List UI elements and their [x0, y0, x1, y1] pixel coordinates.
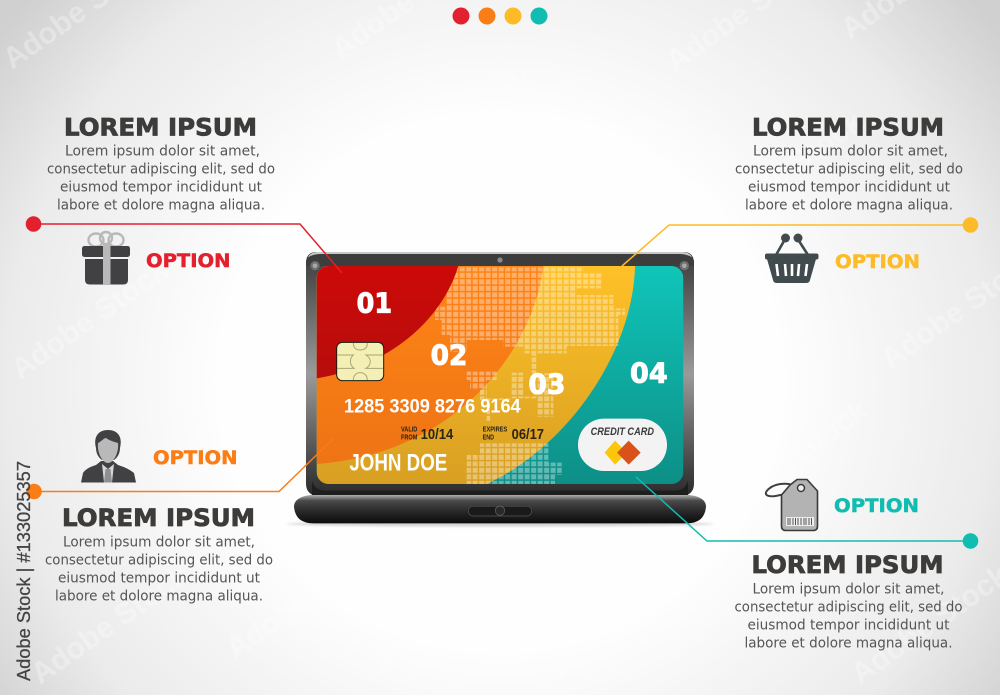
watermark pattern: Adobe Stock: [700, 105, 869, 238]
heading: LOREM IPSUM: [62, 504, 255, 532]
expires end: END: [483, 435, 494, 442]
watermark pattern: Adobe Stock: [5, 253, 174, 386]
text block: eiusmod tempor incididunt ut: [748, 618, 950, 634]
label: option: OPTION: [835, 252, 920, 273]
card colour bands: [317, 266, 683, 484]
laptop: [287, 252, 713, 527]
text block: consectetur adipiscing elit, sed do: [734, 600, 962, 616]
chip: [337, 342, 384, 381]
connector: teal: [636, 477, 978, 549]
panel: top right: [735, 114, 963, 283]
cardholder name: JOHN DOE: [349, 450, 447, 477]
number 03: 03: [528, 367, 565, 400]
laptop base: [294, 495, 706, 523]
heading: LOREM IPSUM: [752, 114, 944, 142]
valid from: FROM: [401, 435, 417, 442]
text block: labore et dolore magna aliqua.: [55, 588, 263, 604]
label: option: OPTION: [146, 251, 230, 272]
label: option: OPTION: [153, 448, 238, 469]
text block: [47, 144, 275, 214]
number 02: 02: [431, 338, 467, 371]
icon: basket: [765, 234, 818, 283]
valid from: [401, 426, 454, 443]
number 01: 01: [357, 287, 392, 320]
laptop lid: [306, 252, 694, 496]
watermark pattern: Adobe Stock: [500, 105, 669, 238]
text block: [734, 582, 962, 652]
watermark pattern: Adobe Stock: [210, 223, 379, 356]
watermark pattern: Adobe Stock: [705, 393, 874, 526]
heading: LOREM IPSUM: [64, 114, 257, 142]
text block: eiusmod tempor incididunt ut: [58, 570, 260, 586]
credit card on screen: [317, 266, 683, 484]
valid from: VALID: [401, 426, 417, 433]
credit card logo badge: CREDIT CARD: [591, 426, 654, 438]
text block: consectetur adipiscing elit, sed do: [735, 162, 963, 178]
expires end: EXPIRES: [483, 426, 508, 433]
text block: Lorem ipsum dolor sit amet,: [65, 144, 260, 160]
text block: [735, 144, 963, 214]
expires end: [483, 426, 544, 443]
watermark pattern: Adobe Stock: [365, 548, 534, 681]
connector: orange: [26, 439, 333, 499]
text block: Lorem ipsum dolor sit amet,: [752, 582, 944, 598]
text block: eiusmod tempor incididunt ut: [60, 180, 262, 196]
top colour dots: [452, 8, 548, 24]
heading: LOREM IPSUM: [752, 551, 944, 579]
watermark pattern: Adobe Stock: [370, 63, 539, 196]
credit card logo badge: [578, 419, 667, 471]
stock credit text: Adobe Stock | #133025357: [14, 461, 34, 681]
icon: price tag: [766, 480, 818, 530]
expires end: 06/17: [512, 427, 544, 443]
text block: consectetur adipiscing elit, sed do: [45, 552, 273, 568]
panel: bottom right: [734, 480, 962, 652]
text block: labore et dolore magna aliqua.: [57, 198, 265, 214]
panel: bottom left: [45, 430, 273, 604]
text block: labore et dolore magna aliqua.: [744, 636, 952, 652]
connector: yellow: [622, 217, 978, 266]
watermark pattern: Adobe Stock: [220, 533, 389, 666]
text block: labore et dolore magna aliqua.: [745, 198, 953, 214]
text block: Lorem ipsum dolor sit amet,: [63, 534, 255, 550]
icon: gift: [82, 232, 130, 285]
panel: top left: [47, 114, 275, 285]
icon: businessman: [81, 430, 136, 482]
pixel world map: [435, 267, 625, 484]
laptop shadow: [287, 521, 713, 527]
text block: eiusmod tempor incididunt ut: [748, 180, 950, 196]
text block: [45, 534, 273, 604]
watermark pattern: Adobe Stock: [25, 558, 194, 691]
connector: red: [26, 216, 342, 273]
label: option: OPTION: [834, 496, 919, 517]
card number: 1285 3309 8276 9164: [344, 397, 521, 418]
text block: Lorem ipsum dolor sit amet,: [753, 144, 948, 160]
number 04: 04: [630, 356, 668, 389]
red band: [317, 266, 458, 378]
watermark pattern: Adobe Stock: [545, 553, 714, 686]
text block: consectetur adipiscing elit, sed do: [47, 162, 275, 178]
valid from: 10/14: [421, 427, 454, 443]
